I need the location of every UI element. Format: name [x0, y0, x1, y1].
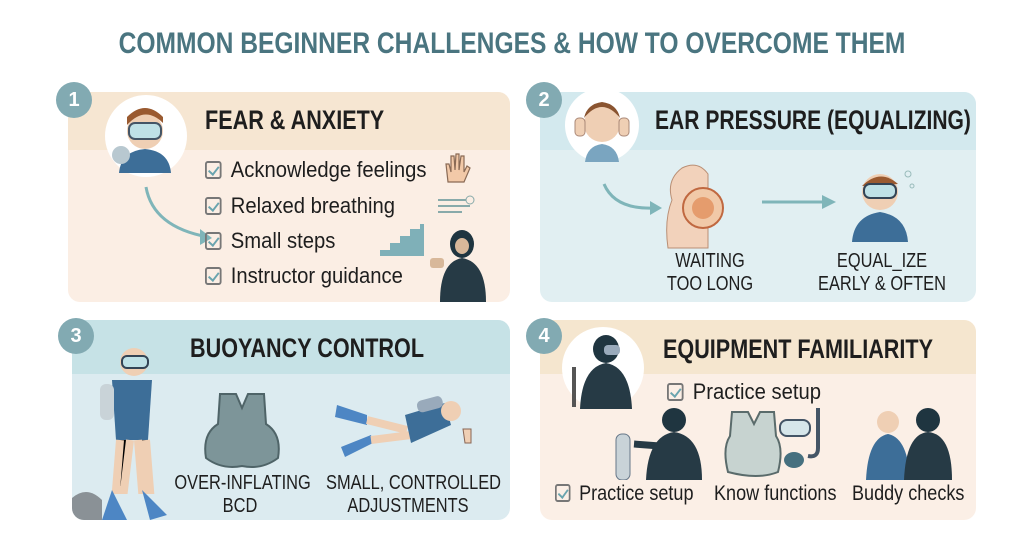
- arrow: straight: [762, 195, 836, 209]
- icon: standing diver: [72, 348, 167, 520]
- number 2: [526, 82, 562, 118]
- number 1: [56, 82, 92, 118]
- icon: hand: [445, 153, 471, 183]
- avatar: nervous diver: [105, 95, 187, 177]
- item: acknowledge: Acknowledge feelings: [231, 157, 427, 182]
- icon: diver with tank: [616, 408, 702, 480]
- icon: ear head: [666, 164, 724, 248]
- item: small steps: Small steps: [231, 228, 335, 253]
- icon: bcd: [204, 393, 280, 468]
- arrow: curved: [144, 186, 212, 245]
- label: waiting too long: TOO LONG: [667, 273, 753, 295]
- title: COMMON BEGINNER CHALLENGES & HOW TO OVERCOME THEM: [119, 27, 905, 60]
- panel: ear pressure: [540, 92, 976, 302]
- avatar: ear pain: [565, 88, 639, 162]
- item: instructor: Instructor guidance: [231, 263, 403, 288]
- icon: swimming diver: [335, 396, 472, 457]
- label: equalize early: EQUAL_IZE: [837, 250, 927, 272]
- label: waiting too long: WAITING: [675, 250, 745, 272]
- checklist: fear: [205, 157, 427, 288]
- item: breathing: Relaxed breathing: [231, 193, 395, 218]
- icon: buddies: [866, 408, 952, 480]
- number 3: [58, 318, 94, 354]
- label: over-inflating: OVER-INFLATING: [174, 472, 311, 494]
- heading: buoyancy: BUOYANCY CONTROL: [190, 333, 424, 363]
- icon: instructor: [430, 230, 486, 302]
- number 1: 1: [68, 89, 80, 111]
- label: small adjustments: [326, 472, 501, 517]
- label: know functions: Know functions: [714, 482, 836, 505]
- label: practice setup bottom: Practice setup: [579, 482, 694, 505]
- arrow: curved: [602, 183, 662, 215]
- number 4: [526, 318, 562, 354]
- label: equalize early: EARLY & OFTEN: [818, 273, 946, 295]
- heading: equipment: EQUIPMENT FAMILIARITY: [663, 334, 933, 364]
- label: buddy checks: Buddy checks: [852, 482, 964, 505]
- label: small adjustments: SMALL, CONTROLLED: [326, 472, 501, 494]
- label: small adjustments: ADJUSTMENTS: [347, 495, 469, 517]
- number 2: 2: [538, 89, 550, 111]
- heading: fear & anxiety: FEAR & ANXIETY: [205, 105, 384, 135]
- label: equalize early: [818, 250, 946, 295]
- label: over-inflating: [174, 472, 311, 517]
- panel: buoyancy: [72, 320, 510, 520]
- avatar: diver with gear: [562, 327, 644, 409]
- panel: fear & anxiety: [68, 92, 510, 302]
- number 4: 4: [538, 325, 550, 347]
- icon: equalizing diver: [852, 170, 914, 242]
- heading: ear pressure: EAR PRESSURE (EQUALIZING): [655, 105, 971, 135]
- item: practice setup top: Practice setup: [693, 379, 821, 404]
- icon: gear: [724, 408, 820, 477]
- icon: breath: [438, 196, 474, 213]
- icon: stairs: [380, 224, 424, 256]
- label: waiting too long: [667, 250, 753, 295]
- label: over-inflating: BCD: [223, 495, 257, 517]
- panel: equipment: [540, 320, 976, 520]
- number 3: 3: [70, 325, 82, 347]
